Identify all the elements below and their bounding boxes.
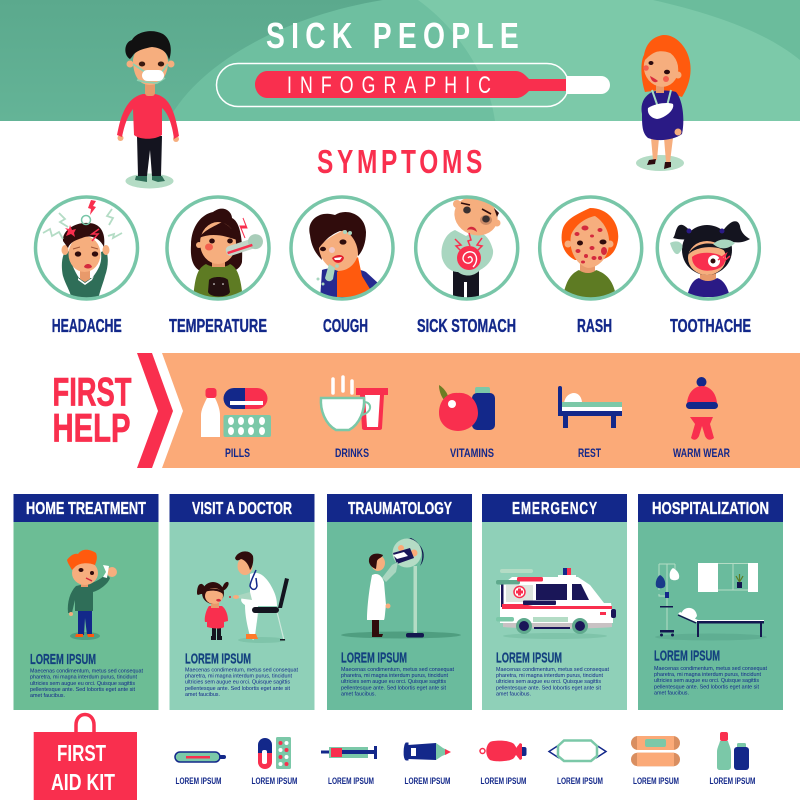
heading: first help: FIRST bbox=[52, 371, 132, 415]
icon: bed bbox=[558, 386, 622, 428]
item: tube: LOREM IPSUM bbox=[404, 776, 450, 786]
text: lorem ipsum: LOREM IPSUM bbox=[496, 650, 562, 666]
label: sick stomach: SICK STOMACH bbox=[417, 316, 516, 336]
item: bottles bbox=[710, 732, 756, 786]
icon: vitamins bbox=[439, 385, 495, 431]
text: lorem ipsum: LOREM IPSUM bbox=[341, 650, 407, 666]
text: lorem ipsum: amet faucibus. bbox=[185, 692, 220, 698]
text: lorem ipsum: amet faucibus. bbox=[496, 691, 531, 697]
heading: symptoms: SYMPTOMS bbox=[317, 143, 486, 180]
text: lorem ipsum: amet faucibus. bbox=[341, 691, 376, 697]
stomach spiral bbox=[455, 233, 482, 270]
text: lorem ipsum: LOREM IPSUM bbox=[30, 652, 96, 668]
symptom: rash bbox=[540, 197, 642, 300]
text: lorem ipsum: pellentesque ante. Sed lobortis eget ante sit bbox=[496, 685, 601, 691]
label: drinks: DRINKS bbox=[335, 447, 369, 460]
first aid kit bag: AID KIT bbox=[51, 769, 115, 795]
panel: home treatment bbox=[14, 494, 158, 710]
text: lorem ipsum: pellentesque ante. Sed lobortis eget ante sit bbox=[30, 687, 135, 693]
figure: boy with tissue bbox=[67, 550, 117, 640]
heading: emergency: EMERGENCY bbox=[512, 498, 598, 518]
item: face mask: LOREM IPSUM bbox=[557, 776, 603, 786]
label: pills: PILLS bbox=[225, 447, 250, 460]
text: lorem ipsum: Maecenas condimentum, metus sed consequat bbox=[185, 668, 299, 674]
first aid kit bag bbox=[34, 714, 137, 800]
illustration: hospital room bbox=[655, 563, 767, 640]
text: lorem ipsum bbox=[185, 652, 299, 698]
panel: hospitalization bbox=[638, 494, 783, 710]
item: tube bbox=[404, 743, 451, 786]
panel: emergency bbox=[482, 494, 627, 710]
symptom: headache bbox=[36, 197, 138, 300]
character: man with mask bbox=[117, 31, 179, 188]
text: lorem ipsum: LOREM IPSUM bbox=[185, 652, 251, 668]
label: vitamins: VITAMINS bbox=[450, 447, 494, 460]
item: syringe bbox=[321, 746, 377, 786]
label: rest: REST bbox=[578, 447, 601, 460]
item: capsule and blister: LOREM IPSUM bbox=[252, 776, 298, 786]
panel: traumatology bbox=[327, 494, 472, 710]
item: rubber bulb bbox=[480, 741, 526, 786]
symptom: toothache bbox=[657, 197, 759, 299]
heading: traumatology: TRAUMATOLOGY bbox=[348, 498, 452, 518]
item: rubber bulb: LOREM IPSUM bbox=[480, 776, 526, 786]
text: lorem ipsum: ultricies sem augue eu orci. Quisque sagittis bbox=[496, 679, 601, 685]
text: lorem ipsum: pharetra, mi magna interdum purus, tincidunt bbox=[654, 672, 761, 678]
panel: visit a doctor bbox=[170, 494, 314, 710]
label: cough: COUGH bbox=[323, 316, 368, 336]
heading: first help bbox=[52, 371, 132, 451]
chevron arrow bbox=[137, 353, 173, 468]
character: girl with cast bbox=[636, 35, 691, 171]
text: lorem ipsum: pharetra, mi magna interdum purus, tincidunt bbox=[185, 674, 292, 680]
text: lorem ipsum: ultricies sem augue eu orci. Quisque sagittis bbox=[30, 681, 135, 687]
text: lorem ipsum: amet faucibus. bbox=[654, 690, 689, 696]
item: bottles: LOREM IPSUM bbox=[710, 776, 756, 786]
figure: doctor with x-ray lamp bbox=[341, 538, 461, 638]
icon: warm wear bbox=[686, 377, 718, 440]
text: lorem ipsum: Maecenas condimentum, metus sed consequat bbox=[30, 669, 144, 675]
text: lorem ipsum: ultricies sem augue eu orci. Quisque sagittis bbox=[185, 680, 290, 686]
first aid kit bag: FIRST bbox=[57, 740, 106, 766]
text: lorem ipsum: amet faucibus. bbox=[30, 693, 65, 699]
label: headache: HEADACHE bbox=[52, 316, 122, 336]
label: temperature: TEMPERATURE bbox=[169, 316, 267, 336]
label: rash: RASH bbox=[577, 316, 612, 336]
text: lorem ipsum: pharetra, mi magna interdum purus, tincidunt bbox=[496, 673, 603, 679]
text: lorem ipsum: pharetra, mi magna interdum purus, tincidunt bbox=[30, 675, 137, 681]
first help band bbox=[162, 353, 800, 468]
title: SICK PEOPLE bbox=[266, 15, 525, 56]
text: lorem ipsum: Maecenas condimentum, metus sed consequat bbox=[654, 666, 768, 672]
item: syringe: LOREM IPSUM bbox=[328, 776, 374, 786]
symptom: cough bbox=[291, 197, 393, 300]
item: thermometer: LOREM IPSUM bbox=[176, 776, 222, 786]
item: bandages bbox=[631, 736, 680, 786]
text: lorem ipsum: pellentesque ante. Sed lobortis eget ante sit bbox=[341, 685, 446, 691]
tissue bbox=[316, 230, 352, 286]
circle ring bbox=[36, 197, 138, 299]
thermometer in mouth bbox=[224, 232, 265, 258]
illustration: ambulance bbox=[496, 568, 616, 639]
heading: home treatment: HOME TREATMENT bbox=[26, 498, 146, 518]
text: lorem ipsum: ultricies sem augue eu orci. Quisque sagittis bbox=[654, 678, 759, 684]
subtitle: INFOGRAPHIC bbox=[287, 72, 499, 99]
text: lorem ipsum: LOREM IPSUM bbox=[654, 649, 720, 665]
text: lorem ipsum: Maecenas condimentum, metus sed consequat bbox=[341, 667, 455, 673]
figure: doctor and child bbox=[197, 551, 289, 643]
label: toothache: TOOTHACHE bbox=[670, 316, 751, 336]
text: lorem ipsum: pharetra, mi magna interdum purus, tincidunt bbox=[341, 673, 448, 679]
header banner bbox=[0, 0, 800, 121]
item: face mask bbox=[549, 740, 606, 786]
text: lorem ipsum bbox=[341, 650, 455, 697]
icon: drinks bbox=[321, 377, 388, 430]
icon: pills bbox=[201, 388, 271, 437]
heading: visit a doctor: VISIT A DOCTOR bbox=[192, 498, 292, 518]
text: lorem ipsum: ultricies sem augue eu orci. Quisque sagittis bbox=[341, 679, 446, 685]
text: lorem ipsum: pellentesque ante. Sed lobortis eget ante sit bbox=[654, 684, 759, 690]
text: lorem ipsum bbox=[30, 652, 144, 699]
heading: first help: HELP bbox=[52, 407, 130, 451]
item: thermometer bbox=[175, 752, 226, 786]
symptom: temperature bbox=[167, 197, 269, 300]
item: bandages: LOREM IPSUM bbox=[633, 776, 679, 786]
pigtails and pain bbox=[670, 221, 750, 271]
thermometer banner bbox=[216, 64, 610, 106]
text: lorem ipsum: Maecenas condimentum, metus sed consequat bbox=[496, 667, 610, 673]
text: lorem ipsum: pellentesque ante. Sed lobortis eget ante sit bbox=[185, 686, 290, 692]
symptom: sick stomach bbox=[416, 190, 518, 300]
text: lorem ipsum bbox=[496, 650, 610, 697]
text: lorem ipsum bbox=[654, 649, 768, 696]
label: warm wear: WARM WEAR bbox=[673, 447, 730, 460]
item: capsule and blister bbox=[252, 737, 298, 786]
